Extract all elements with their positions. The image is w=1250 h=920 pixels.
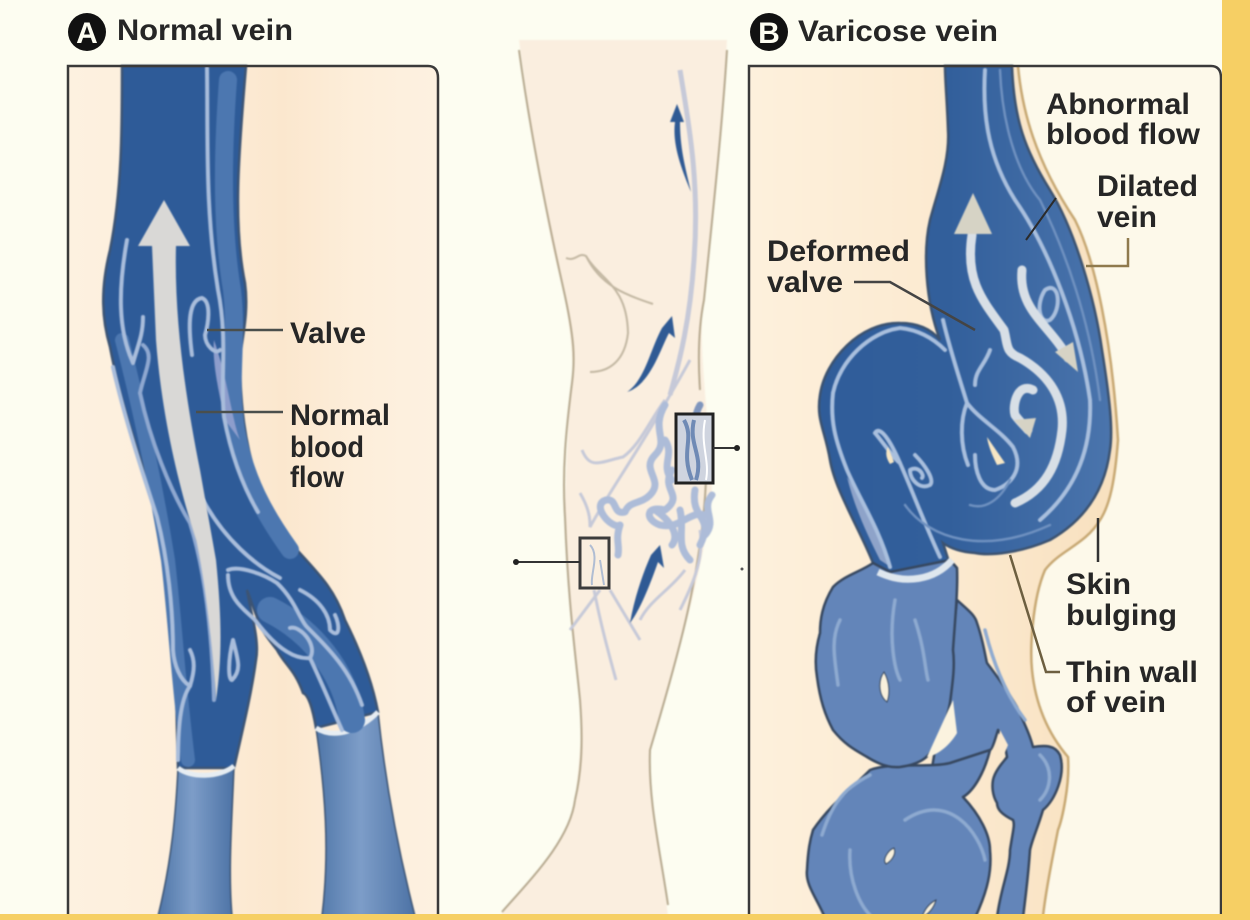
icon: blue arrows on leg [627,104,691,623]
label: Dilated vein: Dilated [1097,170,1198,203]
panel B: varicose vein [749,66,1221,918]
label: Skin bulging: bulging [1066,599,1177,632]
vein wall outlines [832,70,1100,567]
connecting vein and side bulge [930,600,1062,918]
dilated vein [819,66,1111,572]
label: Deformed valve: valve [767,266,843,299]
icon: flow arrowheads [954,193,1078,438]
label: Normal blood flow: Normal [290,399,390,432]
label: Normal blood flow: blood [290,431,364,464]
skin bulge [749,66,1118,918]
heading: A Normal vein: A [76,17,98,50]
heading: B Varicose vein: Varicose vein [798,15,998,48]
label: Thin wall of vein: of vein [1066,686,1166,719]
box: upper right with arrow [676,414,740,483]
vein wall highlights [214,340,240,440]
label: Thin wall of vein [1010,555,1198,719]
label: Abnormal blood flow: blood flow [1046,118,1201,151]
varicose cluster [600,405,712,560]
label: Normal blood flow: flow [290,461,345,494]
label: Dilated vein [1086,170,1198,266]
lighter wall bands [122,80,352,760]
icon: upward flow arrow [138,200,220,700]
surface veins [570,70,701,680]
label: Abnormal blood flow [1026,88,1201,240]
box: lower left with arrow [513,538,609,588]
label: Dilated vein: vein [1097,201,1157,234]
panel B border [749,66,1221,916]
panel A: normal vein [68,66,438,916]
vein trunk [103,66,415,916]
label: Deformed valve [767,235,975,330]
heading: B Varicose vein [750,13,998,51]
upper coil [816,560,957,767]
panel A border [68,66,438,916]
label: Deformed valve: Deformed [767,235,910,268]
label: Thin wall of vein: Thin wall [1066,656,1198,689]
label: Normal blood flow [196,399,390,494]
flow arrows [970,235,1068,503]
lower coil [807,750,990,918]
label: Skin bulging [1066,518,1177,632]
small mark [740,568,744,570]
heading: B Varicose vein: B [758,17,780,50]
label: Skin bulging: Skin [1066,568,1131,601]
heading: A Normal vein: Normal vein [117,14,293,47]
heading: A Normal vein [68,13,293,51]
label: Abnormal blood flow: Abnormal [1046,88,1190,121]
lower varicose coils [807,560,1062,918]
label: Valve: Valve [290,317,366,350]
